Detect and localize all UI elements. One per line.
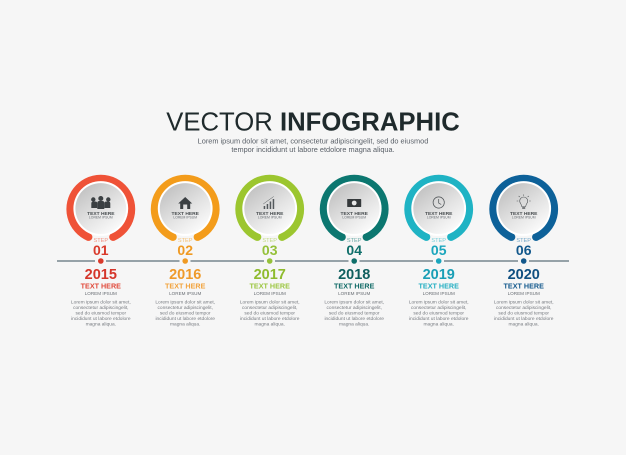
body text 4 bbox=[324, 299, 384, 327]
body text 3 bbox=[240, 299, 300, 327]
ring 5 bbox=[408, 179, 469, 237]
body text 2: magna aliqua. bbox=[170, 321, 200, 327]
ring 6 bbox=[493, 179, 554, 237]
dot 3 bbox=[267, 258, 272, 264]
card label 3: TEXT HERE bbox=[256, 211, 284, 217]
disc 2 bbox=[158, 181, 213, 236]
sublabel 1: LOREM IPSUM bbox=[85, 291, 117, 296]
icon: house bbox=[178, 197, 192, 209]
subtitle text bbox=[198, 136, 428, 154]
body text 4: magna aliqua. bbox=[339, 321, 369, 327]
body text 6: magna aliqua. bbox=[508, 321, 539, 327]
card label 4 bbox=[340, 211, 369, 220]
ring 4 bbox=[324, 179, 385, 237]
dot 6 bbox=[521, 258, 526, 264]
body text 5: incididunt ut labore etdolore bbox=[409, 316, 469, 322]
body text 5 bbox=[409, 299, 469, 327]
dot 4 bbox=[351, 258, 357, 264]
step 3 panel bbox=[239, 179, 300, 327]
card label 5 bbox=[425, 211, 453, 220]
body text 6: Lorem ipsum dolor sit amet, bbox=[494, 299, 554, 305]
dot 5 bbox=[436, 258, 442, 264]
card label 2: LOREM IPSUM bbox=[173, 216, 197, 220]
heading 4: TEXT HERE bbox=[334, 282, 375, 290]
heading 6: TEXT HERE bbox=[504, 282, 544, 290]
body text 2: sed do eiusmod tempor bbox=[160, 310, 211, 316]
body text 4: Lorem ipsum dolor sit amet, bbox=[324, 299, 384, 305]
step number 6: 06 bbox=[516, 242, 532, 258]
step label 2: STEP bbox=[178, 238, 193, 244]
step label 4: STEP bbox=[347, 238, 362, 244]
disc 5 bbox=[411, 181, 466, 236]
step label 5: STEP bbox=[431, 238, 446, 244]
card label 5: TEXT HERE bbox=[425, 211, 453, 217]
card label 3 bbox=[256, 211, 284, 220]
card label 6 bbox=[510, 211, 538, 220]
body text 6: sed do eiusmod tempor bbox=[498, 310, 549, 316]
body text 3: incididunt ut labore etdolore bbox=[240, 316, 300, 322]
dot 1 bbox=[98, 258, 104, 264]
card label 1: TEXT HERE bbox=[87, 211, 115, 217]
step number 4: 04 bbox=[346, 242, 362, 258]
body text 5: magna aliqua. bbox=[423, 321, 454, 327]
card label 2: TEXT HERE bbox=[171, 211, 200, 217]
body text 3: magna aliqua. bbox=[254, 321, 285, 327]
icon: people bbox=[91, 196, 111, 209]
icon: banknote bbox=[347, 199, 361, 207]
card label 4: TEXT HERE bbox=[340, 211, 369, 217]
disc 6 bbox=[496, 181, 551, 236]
year 1: 2015 bbox=[85, 267, 117, 283]
sublabel 2: LOREM IPSUM bbox=[169, 291, 201, 296]
body text 1: incididunt ut labore etdolore bbox=[71, 316, 131, 322]
step label 6: STEP bbox=[516, 238, 531, 244]
body text 4: consectetur adipiscingelit, bbox=[326, 305, 382, 311]
body text 5: sed do eiusmod tempor bbox=[413, 310, 464, 316]
card label 2 bbox=[171, 211, 200, 220]
sublabel 3: LOREM IPSUM bbox=[254, 291, 286, 296]
body text 2: consectetur adipiscingelit, bbox=[157, 305, 213, 311]
disc 3 bbox=[242, 181, 297, 236]
step 2 panel bbox=[155, 179, 216, 327]
card label 4: LOREM IPSUM bbox=[342, 216, 366, 220]
sublabel 6: LOREM IPSUM bbox=[508, 291, 540, 296]
heading 1: TEXT HERE bbox=[81, 282, 121, 290]
body text 6: incididunt ut labore etdolore bbox=[494, 316, 554, 322]
step number 1: 01 bbox=[93, 242, 109, 258]
step number 2: 02 bbox=[177, 242, 193, 258]
body text 4: incididunt ut labore etdolore bbox=[324, 316, 384, 322]
disc 4 bbox=[327, 181, 382, 236]
year 3: 2017 bbox=[254, 267, 286, 283]
ring 1 bbox=[70, 179, 131, 237]
year 4: 2018 bbox=[338, 267, 370, 283]
body text 5: Lorem ipsum dolor sit amet, bbox=[409, 299, 469, 305]
body text 5: consectetur adipiscingelit, bbox=[411, 305, 466, 311]
dot 2 bbox=[182, 258, 188, 264]
step label 1: STEP bbox=[93, 238, 108, 244]
card label 5: LOREM IPSUM bbox=[427, 216, 451, 220]
disc 1 bbox=[73, 181, 128, 236]
step 5 panel bbox=[408, 179, 469, 327]
sublabel 4: LOREM IPSUM bbox=[338, 291, 370, 296]
body text 2: Lorem ipsum dolor sit amet, bbox=[155, 299, 215, 305]
step number 5: 05 bbox=[431, 242, 447, 258]
step label 3: STEP bbox=[262, 238, 277, 244]
year 2: 2016 bbox=[169, 267, 201, 283]
step 6 panel bbox=[493, 179, 554, 327]
body text 6: consectetur adipiscingelit, bbox=[496, 305, 551, 311]
icon: clock bbox=[433, 197, 444, 208]
card label 1 bbox=[87, 211, 115, 220]
body text 1: sed do eiusmod tempor bbox=[75, 310, 126, 316]
subtitle text: tempor incididunt ut labore etdolore magna aliqua. bbox=[231, 145, 395, 154]
body text 6 bbox=[494, 299, 554, 327]
card label 6: TEXT HERE bbox=[510, 211, 538, 217]
body text 1: consectetur adipiscingelit, bbox=[73, 305, 129, 311]
card label 3: LOREM IPSUM bbox=[258, 216, 282, 220]
body text 1: Lorem ipsum dolor sit amet, bbox=[71, 299, 131, 305]
step 4 panel bbox=[324, 179, 385, 327]
body text 2: incididunt ut labore etdolore bbox=[155, 316, 215, 322]
body text 3: consectetur adipiscingelit, bbox=[242, 305, 297, 311]
step 1 panel bbox=[70, 179, 131, 327]
title: VECTOR INFOGRAPHIC bbox=[166, 108, 460, 136]
icon: bar chart bbox=[263, 196, 274, 209]
timeline line bbox=[57, 260, 569, 262]
body text 3: Lorem ipsum dolor sit amet, bbox=[240, 299, 300, 305]
heading 2: TEXT HERE bbox=[165, 282, 206, 290]
body text 1 bbox=[71, 299, 131, 327]
card label 6: LOREM IPSUM bbox=[512, 216, 536, 220]
card label 1: LOREM IPSUM bbox=[89, 216, 113, 220]
year 6: 2020 bbox=[508, 267, 540, 283]
year 5: 2019 bbox=[423, 267, 455, 283]
ring 2 bbox=[155, 179, 216, 237]
heading 5: TEXT HERE bbox=[419, 282, 459, 290]
heading 3: TEXT HERE bbox=[250, 282, 290, 290]
body text 3: sed do eiusmod tempor bbox=[244, 310, 295, 316]
subtitle text: Lorem ipsum dolor sit amet, consectetur adipiscingelit, sed do eiusmod bbox=[198, 136, 428, 146]
body text 1: magna aliqua. bbox=[86, 321, 116, 327]
body text 4: sed do eiusmod tempor bbox=[329, 310, 380, 316]
sublabel 5: LOREM IPSUM bbox=[423, 291, 455, 296]
body text 2 bbox=[155, 299, 215, 327]
icon: light bulb bbox=[517, 194, 531, 208]
step number 3: 03 bbox=[262, 242, 278, 258]
ring 3 bbox=[239, 179, 300, 237]
